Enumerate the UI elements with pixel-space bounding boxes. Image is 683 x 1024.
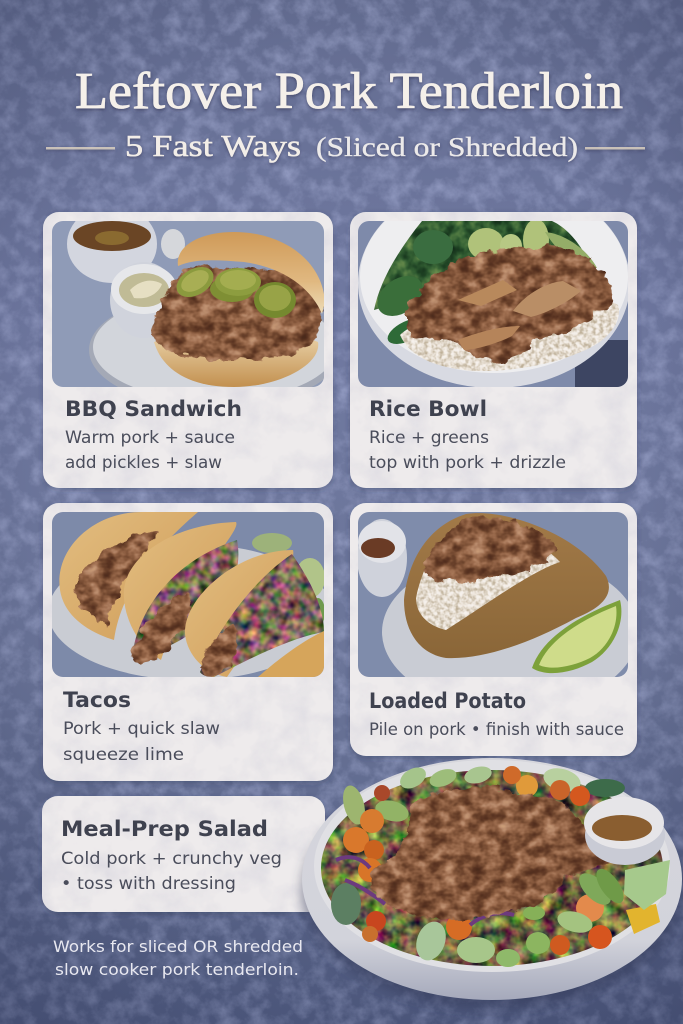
panel: Meal-Prep Salad xyxy=(42,796,325,912)
description: Meal-Prep Salad: • toss with dressing xyxy=(61,874,236,894)
description: Meal-Prep Salad: Cold pork + crunchy veg xyxy=(61,849,282,869)
photo: pork rice bowl xyxy=(358,221,628,387)
panel: Tacos xyxy=(43,503,333,781)
description: Loaded Potato: Pile on pork • finish with sauce xyxy=(369,720,624,740)
description: Tacos xyxy=(63,719,220,765)
shredded pork xyxy=(370,787,616,920)
subtitle xyxy=(46,128,645,163)
description: BBQ Sandwich xyxy=(65,428,235,473)
description: BBQ Sandwich: Warm pork + sauce xyxy=(65,428,235,448)
description: Tacos: squeeze lime xyxy=(63,745,184,765)
panel: BBQ Sandwich xyxy=(43,205,341,488)
photo: pork tacos xyxy=(48,512,332,680)
description: Tacos: Pork + quick slaw xyxy=(63,719,220,739)
photo: loaded baked potato xyxy=(358,512,628,677)
footer note xyxy=(53,937,303,979)
description: Rice Bowl: top with pork + drizzle xyxy=(369,453,566,473)
title: Leftover Pork Tenderloin xyxy=(75,63,623,120)
description: BBQ Sandwich: add pickles + slaw xyxy=(65,453,222,473)
panel: Loaded Potato xyxy=(350,503,638,756)
heading: Meal-Prep Salad: Meal-Prep Salad xyxy=(61,817,268,841)
heading: BBQ Sandwich: BBQ Sandwich xyxy=(65,397,242,421)
description: Rice Bowl: Rice + greens xyxy=(369,428,489,448)
panel: Rice Bowl xyxy=(350,178,637,488)
dressing cup xyxy=(584,797,665,865)
heading: Loaded Potato: Loaded Potato xyxy=(369,689,526,713)
subtitle: (Sliced or Shredded) xyxy=(316,132,578,162)
vegetables xyxy=(331,763,670,967)
heading: Tacos: Tacos xyxy=(63,688,131,712)
footer note: Works for sliced OR shredded xyxy=(53,937,303,956)
description: Rice Bowl xyxy=(369,428,566,473)
footer note: slow cooker pork tenderloin. xyxy=(55,960,299,979)
description: Meal-Prep Salad xyxy=(61,849,282,894)
heading: Rice Bowl: Rice Bowl xyxy=(369,397,487,421)
subtitle: 5 Fast Ways xyxy=(125,128,301,163)
photo: meal-prep salad bowl xyxy=(302,758,682,1008)
photo: BBQ pork sandwich xyxy=(52,221,324,387)
